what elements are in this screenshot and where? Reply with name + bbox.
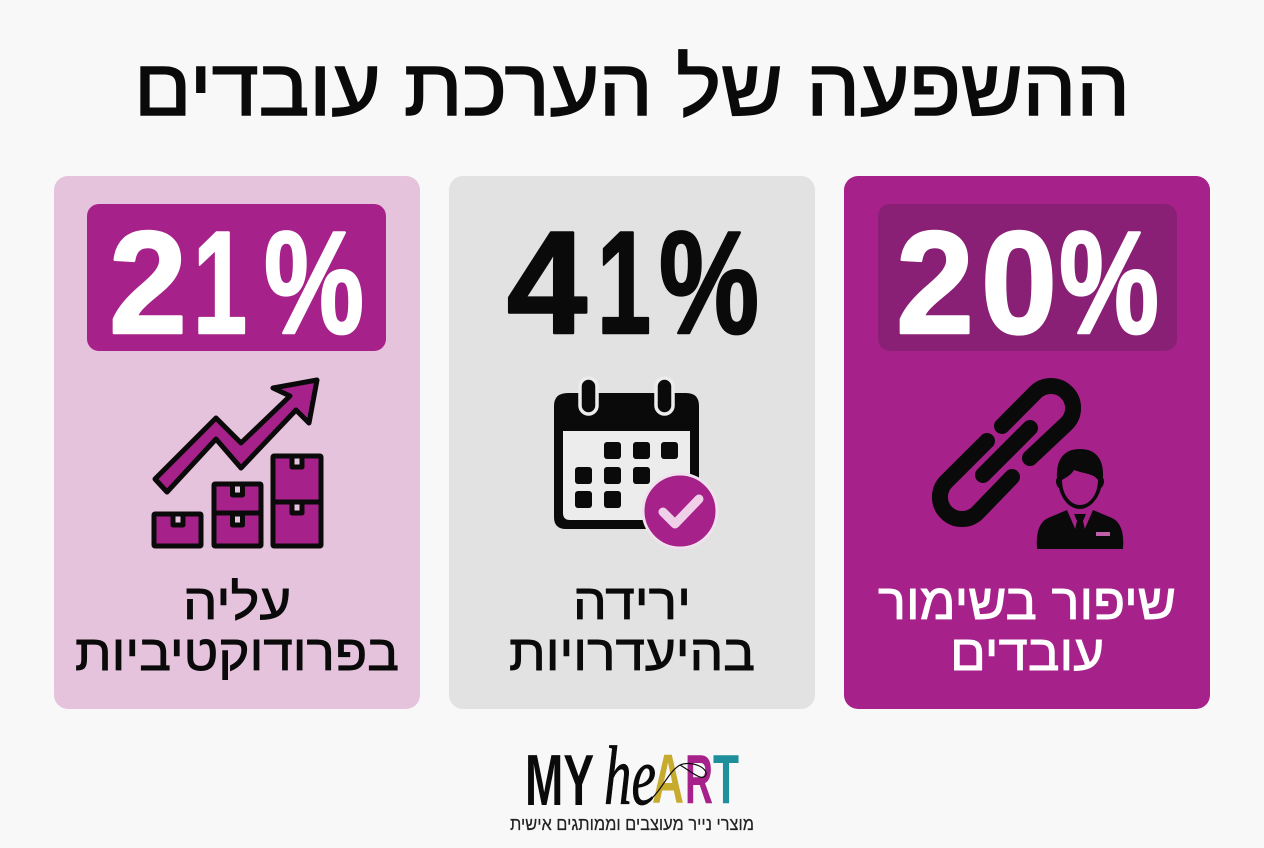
percentage: 41%: 4 — [507, 201, 587, 364]
percentage badge: 21%: 2 — [109, 201, 187, 364]
label: retention: עובדים — [950, 625, 1104, 681]
label: productivity — [75, 574, 399, 681]
logo: My heART: T — [713, 740, 739, 818]
percentage badge: 21% — [87, 201, 386, 364]
logo tagline: מוצרי נייר מעוצבים וממותגים אישית — [510, 814, 754, 834]
label: retention: שיפור בשימור — [878, 574, 1176, 630]
percentage badge: 21%: 1 — [193, 201, 247, 364]
icon: chain link and employee — [940, 386, 1123, 549]
logo: My heART: MY — [525, 741, 594, 821]
logo: My heART: he — [604, 730, 656, 823]
percentage badge: 21%: % — [264, 201, 364, 364]
panel: retention — [844, 176, 1210, 709]
icon: calendar with check — [554, 378, 717, 548]
label: absenteeism: בהיעדרויות — [509, 625, 755, 681]
title: ההשפעה של הערכת עובדים — [134, 43, 1130, 132]
logo: My heART — [510, 730, 754, 834]
label: retention — [878, 574, 1176, 681]
percentage: 41%: 1 — [597, 201, 651, 364]
label: absenteeism — [509, 574, 755, 681]
label: productivity: עליה — [183, 574, 291, 630]
percentage badge: 20%: 2 — [896, 201, 974, 364]
logo: My heART: R — [685, 740, 713, 818]
percentage: 41% — [507, 201, 759, 364]
percentage: 41%: % — [659, 201, 759, 364]
logo: My heART: A — [652, 740, 684, 818]
percentage badge: 20% — [878, 201, 1177, 364]
panel: productivity — [54, 176, 420, 709]
label: productivity: בפרודוקטיביות — [75, 625, 399, 681]
percentage badge: 20%: % — [1059, 201, 1159, 364]
percentage badge: 20%: 0 — [981, 201, 1057, 364]
label: absenteeism: ירידה — [573, 574, 691, 630]
panel: absenteeism — [449, 176, 815, 709]
icon: rising arrow and boxes — [154, 380, 321, 546]
